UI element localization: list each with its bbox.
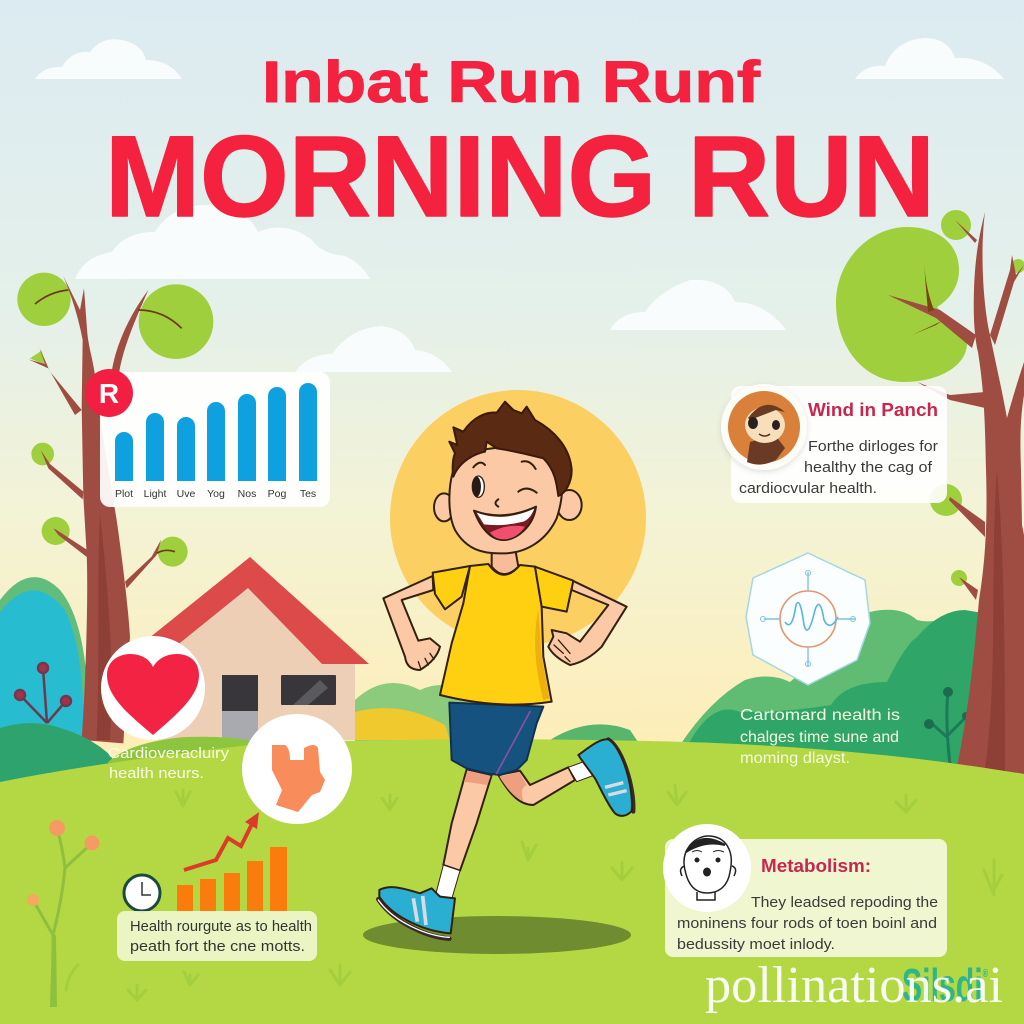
back shoe sole [608, 739, 633, 812]
torso shirt [440, 564, 552, 705]
text: cardiovascular note: health neurs. [109, 765, 204, 782]
shorts stripe [497, 712, 530, 773]
grass tufts [66, 785, 1002, 1000]
back shoe [578, 739, 632, 816]
wind text: healthy the cag of [804, 459, 933, 476]
bars [177, 847, 287, 911]
panel: wind in panch [721, 384, 947, 503]
bar labels: Tes [300, 488, 316, 500]
dark plant left [15, 663, 71, 723]
title [105, 50, 935, 241]
text: cartomard health: moming dlayst. [740, 750, 850, 767]
face [449, 447, 562, 553]
text: cartomard health: chalges time sune and [740, 729, 899, 746]
badge R [85, 369, 133, 417]
bar labels: Pog [268, 488, 286, 500]
orange bar chart [177, 812, 287, 911]
shirt shade [535, 610, 549, 700]
wink and brows [473, 461, 537, 507]
text: cartomard health: Cartomard nealth is [740, 707, 900, 724]
panel: bar chart card [85, 369, 330, 507]
tree left [17, 273, 213, 743]
metabolism text: moninens four rods of toen boinl and [677, 915, 937, 932]
note text [130, 918, 312, 955]
mouth [474, 507, 536, 540]
title line two: MORNING RUN [105, 113, 935, 241]
wind heading: Wind in Panch [808, 400, 938, 420]
runner shadow [363, 916, 631, 954]
legs and shoes [378, 703, 633, 939]
distant hills [0, 577, 1024, 785]
watermark: pollinations.ai [705, 957, 1003, 1014]
card background [100, 372, 330, 507]
trunk shading [97, 513, 112, 740]
wind text: cardiocvular health. [739, 480, 877, 497]
teeth [477, 509, 534, 525]
front sock [436, 865, 460, 903]
back leg [498, 767, 575, 805]
title line one: Inbat Run Runf [262, 50, 761, 115]
metabolism text [677, 894, 938, 953]
bar labels: Uve [177, 488, 195, 500]
low hill left [0, 723, 112, 790]
bar labels: Plot [115, 488, 133, 500]
right fingers [554, 640, 570, 662]
panel: health note [117, 911, 317, 961]
back shoe stripes [605, 783, 627, 795]
metabolism text: bedussity moet inlody. [677, 936, 835, 953]
pupil [472, 477, 481, 497]
plant with orange buds [27, 820, 100, 1007]
front leg shade [464, 771, 491, 785]
icon: portrait [721, 384, 807, 470]
twigs right [912, 263, 942, 335]
right ear [557, 490, 582, 520]
trend arrow [184, 812, 259, 870]
back sock [568, 759, 597, 782]
foliage right [836, 210, 1024, 586]
trunk left [63, 276, 130, 743]
bar labels [115, 488, 316, 500]
right arm [548, 581, 627, 665]
twigs left [35, 290, 182, 553]
icon: orange fist [242, 714, 352, 824]
neck [492, 552, 518, 574]
card background [731, 386, 947, 503]
icon: clock [124, 875, 160, 911]
trunk shading [985, 470, 1005, 772]
ground [0, 739, 1024, 1024]
hair [449, 402, 572, 496]
note text: Health rourgute as to health [130, 918, 312, 935]
bar labels: Nos [238, 488, 256, 500]
front shoe [379, 887, 455, 933]
bars [115, 383, 317, 481]
text: cartomard health [740, 707, 900, 767]
runner [378, 402, 633, 939]
tree right [836, 210, 1024, 775]
front shoe stripes [413, 896, 426, 925]
eye [472, 476, 484, 497]
badge R: R [99, 378, 119, 409]
house roof [128, 557, 369, 664]
front shoe sole [378, 899, 449, 939]
note text: peath fort the cne motts. [130, 938, 305, 955]
metabolism heading: Metabolism: [761, 856, 871, 876]
dark plant right [924, 687, 970, 765]
left fingers [418, 653, 434, 668]
icon: heart wave hexagon [746, 553, 870, 685]
house wall [150, 585, 355, 740]
right sleeve [535, 567, 573, 612]
trunk right [957, 212, 1024, 775]
upper body [383, 402, 627, 705]
logo text: ® [983, 968, 988, 980]
metabolism text: They leadsed repoding the [751, 894, 938, 911]
card background [665, 839, 947, 957]
branches right [888, 220, 1024, 600]
branches left [28, 290, 161, 588]
house window [281, 675, 336, 705]
clouds [35, 38, 1004, 372]
wind text [739, 438, 938, 497]
left arm [383, 576, 440, 670]
wind text: Forthe dirloges for [808, 438, 938, 455]
logo text: Silsdi [902, 959, 1024, 1011]
house door [222, 675, 258, 740]
panel: metabolism [663, 824, 947, 957]
front shoe welt [378, 900, 449, 937]
foliage left [17, 273, 213, 567]
bar labels: Light [144, 488, 166, 500]
left ear [434, 493, 454, 521]
text: cardiovascular note [108, 745, 230, 782]
front leg [443, 769, 492, 871]
icon: heart [101, 636, 205, 740]
sun [390, 390, 646, 646]
shorts [449, 703, 543, 775]
card background [117, 911, 317, 961]
house [128, 557, 369, 740]
text: cardiovascular note: Cardioveracluiry [108, 745, 230, 762]
bar labels: Yog [207, 488, 225, 500]
back leg shade [499, 772, 527, 802]
mid green hill [108, 737, 275, 775]
left sleeve [433, 566, 470, 609]
tongue [490, 526, 525, 539]
icon: face [663, 824, 751, 912]
